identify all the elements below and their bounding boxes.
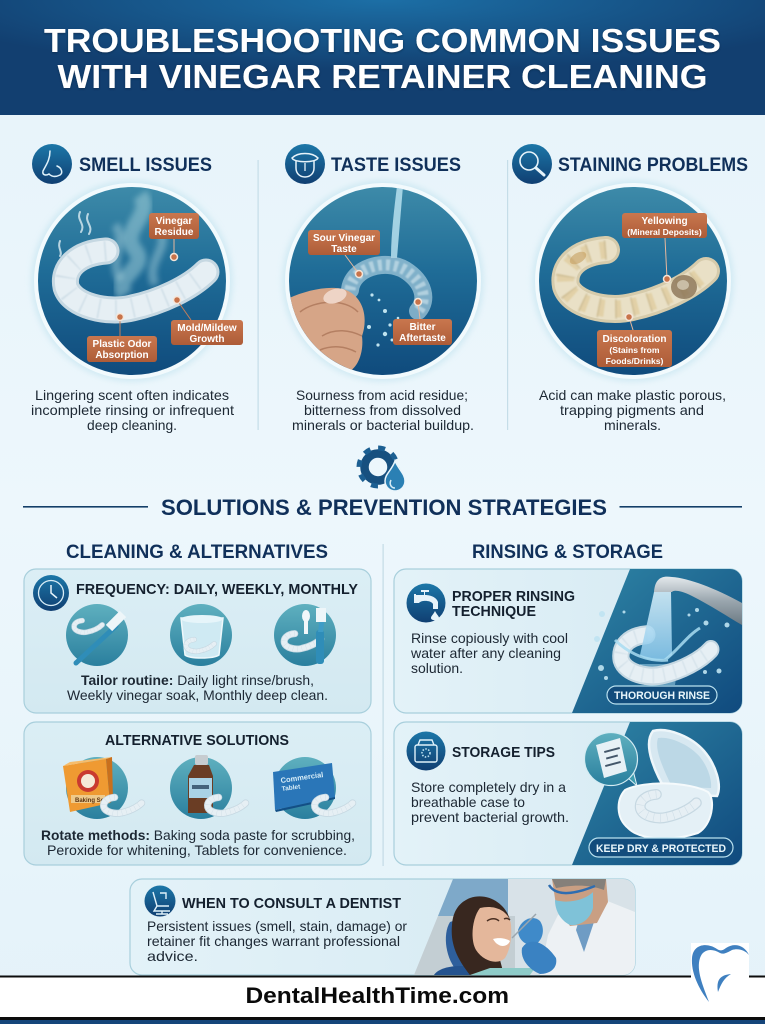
icon: water tap bbox=[406, 584, 446, 622]
heading: proper rinsing technique bbox=[452, 588, 575, 620]
text: storage instructions: breathable case to bbox=[411, 795, 525, 810]
illustration: desiccant packet callout bbox=[584, 732, 638, 786]
panel: smell issues bbox=[31, 144, 243, 433]
text: rinsing instructions: water after any cleaning bbox=[410, 646, 561, 661]
panel: storage tips bbox=[394, 722, 742, 865]
title banner: TROUBLESHOOTING COMMON ISSUES bbox=[44, 22, 721, 59]
caption: smell: incomplete rinsing or infrequent bbox=[31, 402, 234, 418]
caption: smell: Lingering scent often indicates bbox=[35, 387, 229, 403]
text: rotate methods bbox=[41, 828, 355, 858]
callout: plastic odor absorption: Absorption bbox=[95, 350, 149, 361]
heading: proper rinsing technique: TECHNIQUE bbox=[452, 603, 536, 620]
heading: storage tips: STORAGE TIPS bbox=[452, 744, 555, 761]
callout: discoloration: Discoloration bbox=[603, 334, 666, 345]
caption: staining: Acid can make plastic porous, bbox=[539, 387, 726, 403]
callout: discoloration: (Stains from bbox=[609, 345, 660, 355]
callout: yellowing bbox=[622, 213, 707, 282]
title banner: WITH VINEGAR RETAINER CLEANING bbox=[58, 58, 708, 95]
icon: gear with water drop bbox=[359, 448, 405, 491]
heading: proper rinsing technique: PROPER RINSING bbox=[452, 588, 575, 605]
text: storage instructions: Store completely dry in a bbox=[411, 780, 566, 795]
illustration: smelly retainer bbox=[31, 180, 233, 382]
text: rinsing instructions: Rinse copiously with cool bbox=[411, 631, 568, 646]
icon: storage box bbox=[406, 732, 446, 770]
callout: vinegar residue: Vinegar bbox=[156, 216, 192, 227]
illustration: retainer rinsed under faucet bbox=[572, 569, 742, 713]
panel: alternative solutions bbox=[24, 722, 371, 865]
heading: frequency: FREQUENCY: DAILY, WEEKLY, MONTHLY bbox=[76, 581, 358, 598]
caption: taste bbox=[292, 387, 474, 433]
panel: proper rinsing technique bbox=[394, 569, 742, 713]
text: consult advice: Persistent issues (smell, stain, damage) or bbox=[147, 919, 407, 934]
text: storage instructions bbox=[411, 780, 569, 825]
text: tailor routine: Tailor routine: Daily light rinse/brush, bbox=[81, 673, 314, 688]
title banner bbox=[0, 0, 765, 115]
caption: smell: deep cleaning. bbox=[87, 417, 177, 433]
panel: taste issues bbox=[280, 144, 484, 433]
heading: taste issues: TASTE ISSUES bbox=[331, 155, 461, 176]
subheading: rinsing and storage: RINSING & STORAGE bbox=[472, 542, 663, 563]
icon: dental chair bbox=[144, 886, 176, 916]
callout: vinegar residue bbox=[149, 213, 199, 260]
caption: staining: trapping pigments and bbox=[560, 402, 704, 418]
caption: smell bbox=[31, 387, 234, 433]
callout: mold and mildew growth: Growth bbox=[190, 334, 224, 345]
footer band bbox=[0, 976, 765, 1024]
icon: cleaning tablets box: Commercial bbox=[280, 770, 324, 785]
icon: baking soda box: Baking Soda bbox=[75, 798, 112, 804]
icon: magnifying glass bbox=[512, 144, 552, 184]
icon: peroxide bottle bbox=[170, 755, 246, 819]
caption: taste: Sourness from acid residue; bbox=[296, 387, 468, 403]
panel: staining problems bbox=[512, 144, 748, 433]
badge: thorough rinse: THOROUGH RINSE bbox=[614, 690, 710, 702]
icon: nose bbox=[32, 144, 72, 184]
icon: cleaning tablets box: Tablet bbox=[281, 783, 302, 793]
badge: keep dry and protected bbox=[589, 838, 733, 857]
icon: retainer soaking in glass bbox=[170, 604, 232, 666]
callout: yellowing: (Mineral Deposits) bbox=[627, 227, 702, 237]
icon: cleaning tablets box bbox=[273, 757, 353, 819]
text: consult advice: retainer fit changes warrant professional bbox=[147, 934, 400, 949]
callout: plastic odor absorption: Plastic Odor bbox=[93, 339, 152, 350]
caption: staining bbox=[539, 387, 726, 433]
callout: vinegar residue: Residue bbox=[155, 227, 194, 238]
callout: discoloration: Foods/Drinks) bbox=[606, 356, 664, 366]
text: rinsing instructions: solution. bbox=[411, 661, 463, 676]
callout: mold and mildew growth bbox=[171, 296, 243, 345]
icon: clock bbox=[33, 575, 69, 611]
caption: staining: minerals. bbox=[604, 417, 661, 433]
heading: alternative solutions: ALTERNATIVE SOLUTIONS bbox=[105, 732, 289, 749]
icon: retainer with electric toothbrush bbox=[274, 604, 336, 666]
text: rotate methods: Rotate methods: Baking soda paste for scrubbing, bbox=[41, 828, 355, 843]
callout: bitter aftertaste: Aftertaste bbox=[399, 333, 446, 344]
heading: smell issues: SMELL ISSUES bbox=[79, 155, 212, 176]
text: consult advice bbox=[147, 919, 407, 964]
panel: when to consult a dentist bbox=[130, 879, 635, 975]
callout: yellowing: Yellowing bbox=[641, 216, 688, 227]
subheading: cleaning and alternatives: CLEANING & ALTERNATIVES bbox=[66, 542, 328, 563]
text: storage instructions: prevent bacterial growth. bbox=[411, 810, 569, 825]
callout: bitter aftertaste bbox=[393, 298, 452, 345]
website name: DentalHealthTime.com bbox=[246, 983, 509, 1008]
callout: bitter aftertaste: Bitter bbox=[409, 322, 436, 333]
caption: taste: bitterness from dissolved bbox=[304, 402, 461, 418]
callout: sour vinegar taste: Taste bbox=[331, 244, 357, 255]
heading: when to consult a dentist: WHEN TO CONSULT A DENTIST bbox=[182, 895, 401, 912]
section heading: solutions and prevention strategies: SOLUTIONS & PREVENTION STRATEGIES bbox=[161, 495, 607, 520]
illustration: rinsing retainer in hand bbox=[280, 180, 484, 382]
icon: tongue bbox=[285, 144, 325, 184]
callout: sour vinegar taste: Sour Vinegar bbox=[313, 233, 375, 244]
callout: sour vinegar taste bbox=[308, 230, 380, 278]
badge: thorough rinse bbox=[607, 686, 717, 704]
panel: frequency bbox=[24, 569, 371, 713]
illustration: stained retainer bbox=[532, 180, 734, 382]
logo: tooth bbox=[691, 943, 749, 1003]
text: rotate methods: Peroxide for whitening, Tablets for convenience. bbox=[47, 843, 347, 858]
badge: keep dry and protected: KEEP DRY & PROTECTED bbox=[596, 843, 726, 855]
heading: staining problems: STAINING PROBLEMS bbox=[558, 155, 748, 176]
text: tailor routine: Weekly vinegar soak, Monthly deep clean. bbox=[67, 688, 328, 703]
icon: retainer and toothbrush bbox=[66, 604, 128, 666]
text: rinsing instructions bbox=[410, 631, 568, 676]
callout: mold and mildew growth: Mold/Mildew bbox=[177, 323, 237, 334]
text: tailor routine bbox=[67, 673, 328, 703]
icon: baking soda box bbox=[63, 757, 142, 819]
text: consult advice: advice. bbox=[147, 949, 198, 964]
illustration: dentist treating patient bbox=[414, 879, 635, 975]
illustration: open retainer case bbox=[572, 722, 742, 865]
callout: discoloration bbox=[597, 314, 672, 367]
callout: plastic odor absorption bbox=[87, 314, 157, 362]
caption: taste: minerals or bacterial buildup. bbox=[292, 417, 474, 433]
